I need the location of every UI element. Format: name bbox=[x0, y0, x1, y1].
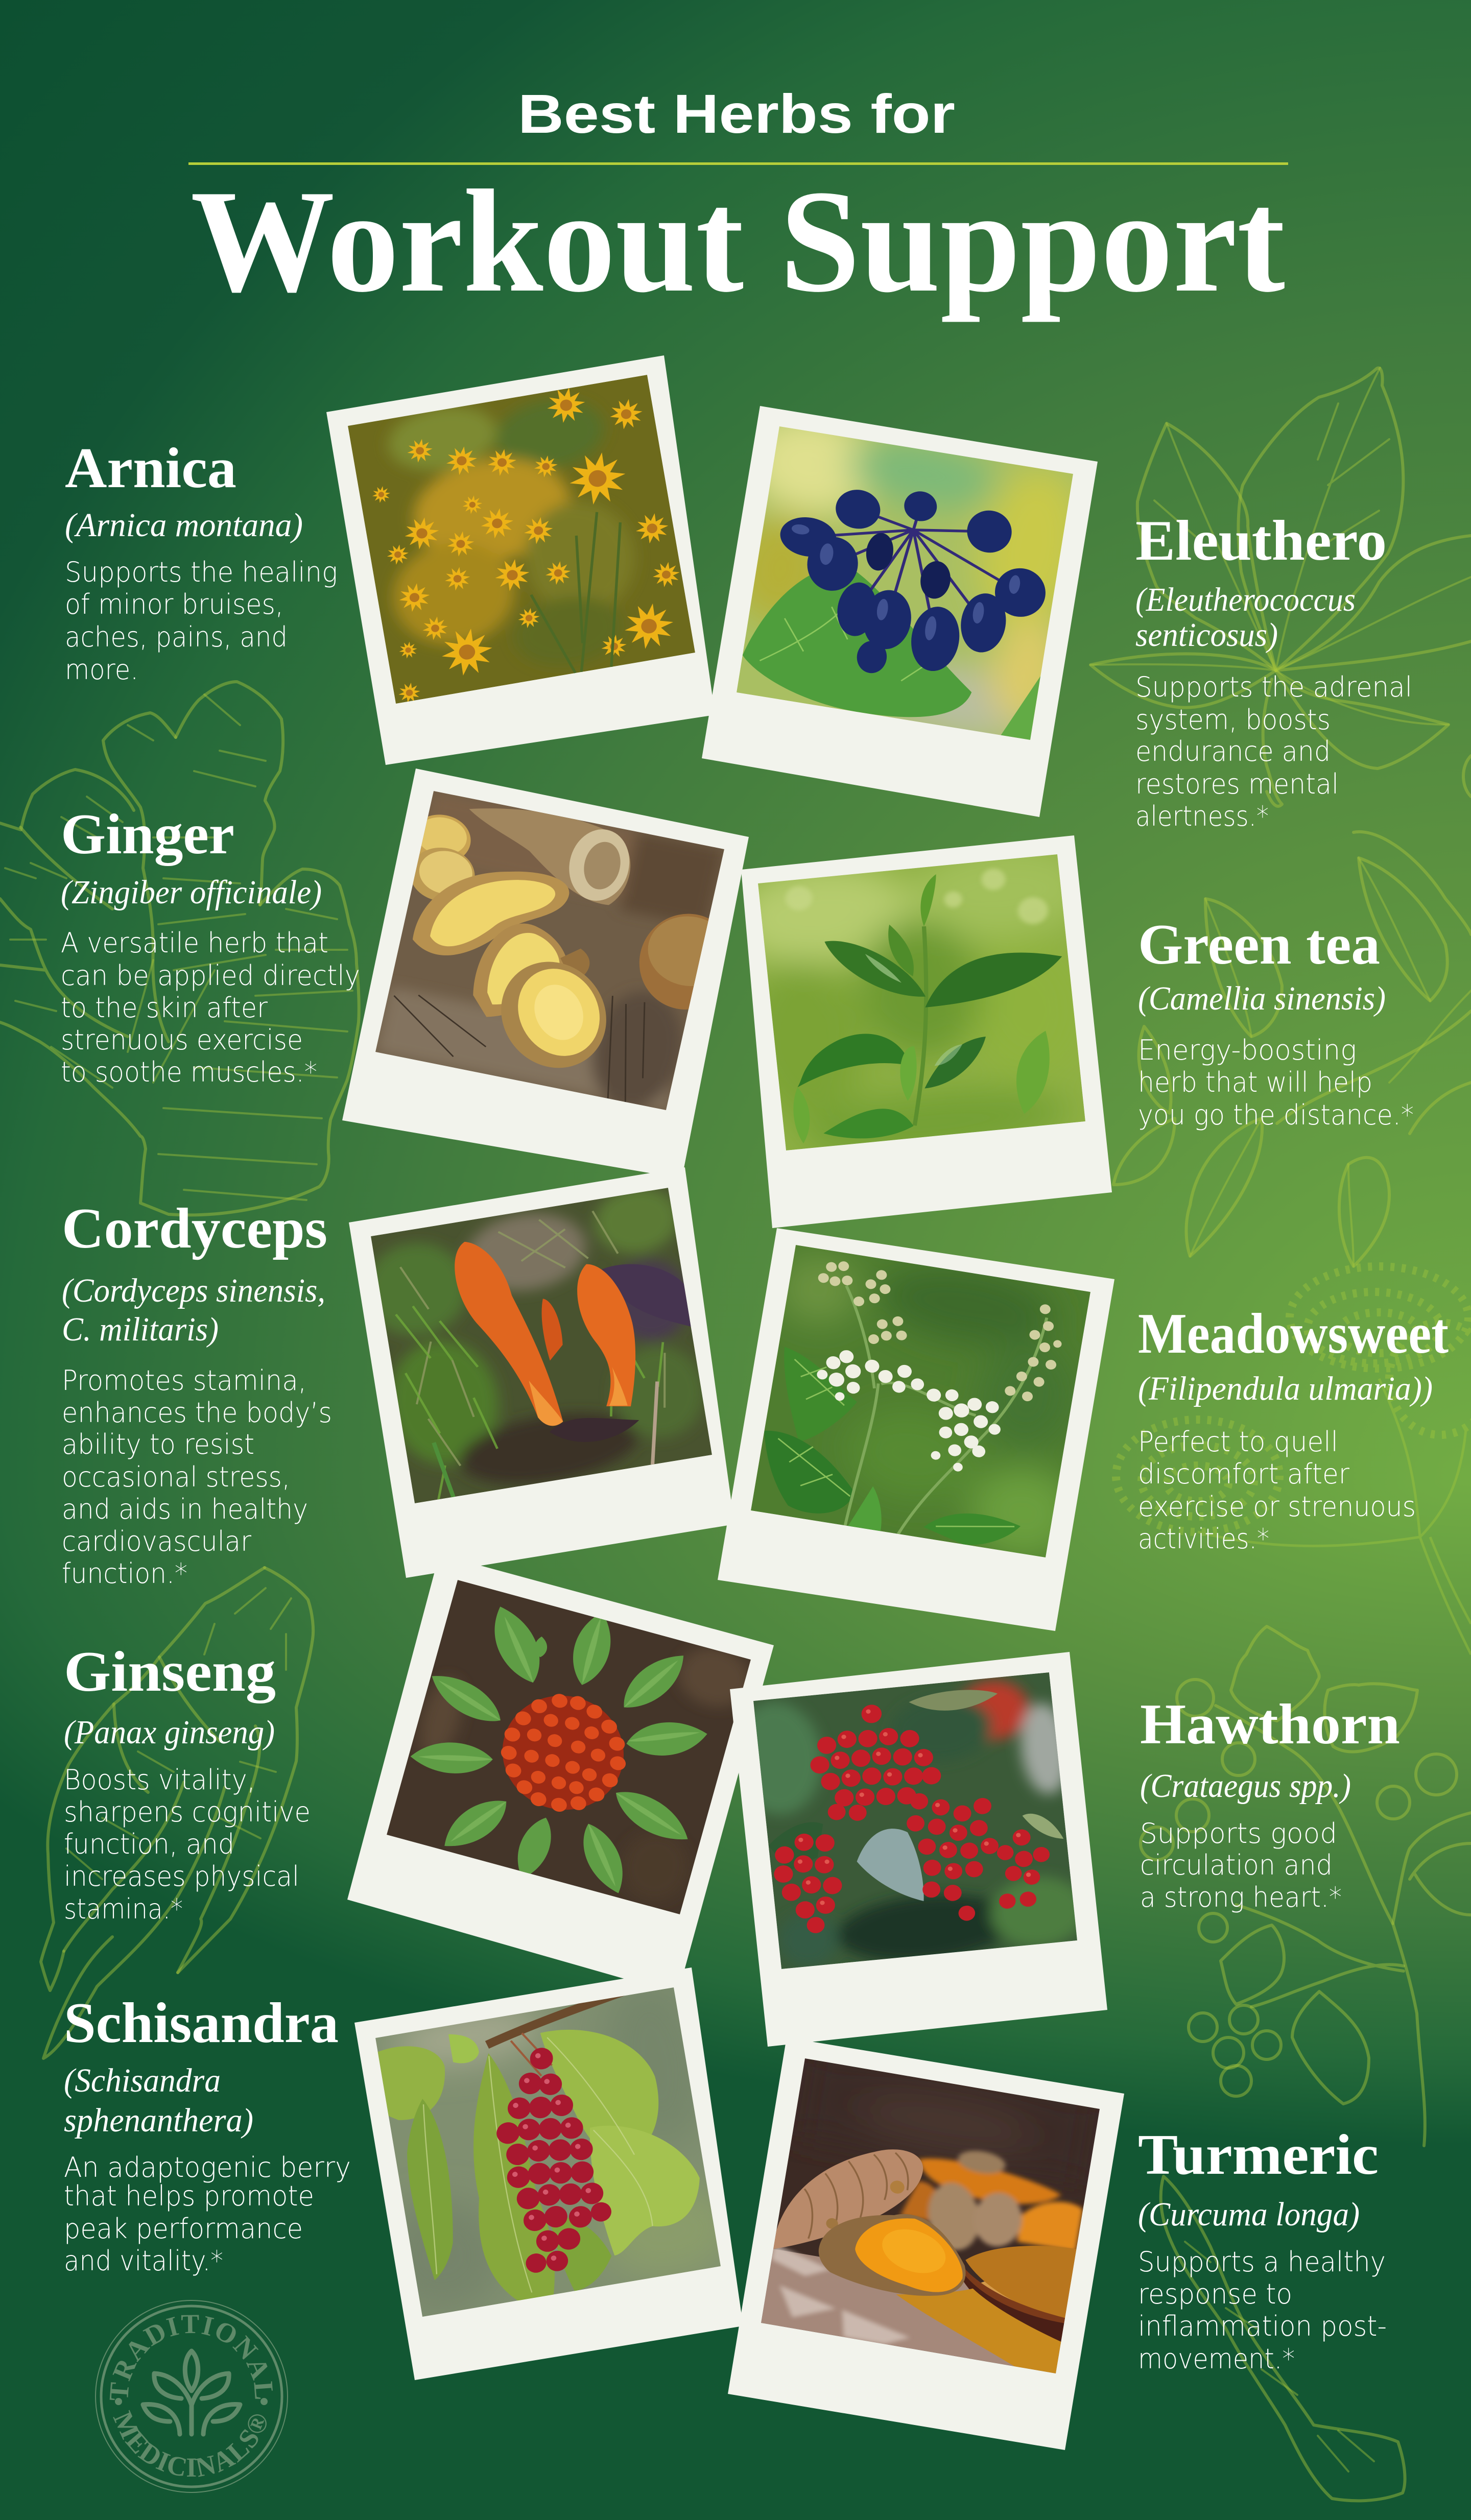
line art: ginger root bbox=[0, 682, 359, 1215]
description: inflammation post- bbox=[1138, 2310, 1387, 2342]
latin name: sphenanthera) bbox=[64, 2102, 253, 2139]
description: function.* bbox=[62, 1557, 187, 1590]
title rule bbox=[188, 162, 1288, 165]
herb text: Cordyceps bbox=[62, 1197, 332, 1590]
latin name: (Filipendula ulmaria)) bbox=[1138, 1370, 1433, 1407]
description: system, boosts bbox=[1135, 704, 1331, 736]
photo: arnica flowers bbox=[347, 372, 695, 705]
description: and aids in healthy bbox=[62, 1493, 308, 1525]
heading: Turmeric bbox=[1138, 2123, 1379, 2187]
herb text: Ginger bbox=[61, 803, 360, 1088]
latin name: (Cordyceps sinensis, bbox=[62, 1272, 325, 1309]
herb text: Arnica bbox=[65, 437, 338, 686]
description: circulation and bbox=[1140, 1849, 1333, 1881]
latin name: (Curcuma longa) bbox=[1138, 2196, 1360, 2233]
logo leaf mark bbox=[143, 2351, 240, 2434]
line art: hawthorn branch bbox=[1141, 1626, 1471, 2146]
photo: schisandra red berries bbox=[343, 1970, 742, 2324]
herb text: Green tea bbox=[1138, 913, 1414, 1131]
line art: ginseng root bbox=[41, 1568, 313, 2058]
description: exercise or strenuous bbox=[1138, 1491, 1416, 1523]
description: aches, pains, and bbox=[65, 621, 288, 653]
latin name: (Camellia sinensis) bbox=[1138, 980, 1386, 1017]
photo: ginger root slices bbox=[375, 791, 724, 1110]
logo: Traditional Medicinals seal bbox=[95, 2300, 288, 2493]
description: herb that will help bbox=[1138, 1066, 1372, 1098]
description: Boosts vitality, bbox=[64, 1764, 255, 1796]
description: endurance and bbox=[1135, 735, 1331, 767]
description: response to bbox=[1138, 2278, 1292, 2310]
description: Supports good bbox=[1140, 1817, 1337, 1850]
polaroid: Eleuthero bbox=[702, 406, 1098, 817]
description: can be applied directly bbox=[61, 959, 360, 992]
line art: turmeric root bbox=[1161, 2176, 1405, 2501]
description: stamina.* bbox=[64, 1893, 183, 1925]
description bbox=[1138, 2246, 1387, 2375]
title line 1: Best Herbs for bbox=[518, 83, 955, 145]
herb text: Turmeric bbox=[1138, 2123, 1387, 2375]
polaroid: Schisandra bbox=[343, 1967, 743, 2380]
latin name: (Crataegus spp.) bbox=[1140, 1767, 1351, 1805]
description: Supports a healthy bbox=[1138, 2246, 1386, 2278]
description: Promotes stamina, bbox=[62, 1364, 306, 1397]
polaroid: Hawthorn bbox=[727, 1652, 1107, 2047]
description: to the skin after bbox=[61, 992, 268, 1024]
description: restores mental bbox=[1135, 768, 1339, 800]
description: ability to resist bbox=[62, 1428, 254, 1460]
polaroid: Cordyceps bbox=[349, 1167, 734, 1578]
herb text: Ginseng bbox=[64, 1640, 311, 1925]
photo: green tea plant bbox=[727, 838, 1117, 1172]
main title: Workout Support bbox=[191, 160, 1287, 323]
description: sharpens cognitive bbox=[64, 1796, 311, 1828]
description bbox=[64, 2151, 351, 2277]
line art: green tea leaves bbox=[1113, 858, 1471, 1266]
description: A versatile herb that bbox=[61, 927, 328, 959]
polaroid: Ginger bbox=[342, 769, 760, 1179]
heading: Cordyceps bbox=[62, 1197, 327, 1260]
description: discomfort after bbox=[1138, 1458, 1350, 1490]
herb text: Eleuthero bbox=[1135, 509, 1412, 832]
heading: Eleuthero bbox=[1135, 509, 1387, 572]
description: alertness.* bbox=[1135, 800, 1269, 832]
description: Perfect to quell bbox=[1138, 1426, 1338, 1458]
description: movement.* bbox=[1138, 2343, 1295, 2375]
description: to soothe muscles.* bbox=[61, 1056, 317, 1088]
description: and vitality.* bbox=[64, 2245, 223, 2277]
logo text bottom: MEDICINALS® bbox=[113, 2410, 267, 2477]
polaroid: Green tea bbox=[727, 835, 1117, 1228]
photo: eleuthero berries bbox=[737, 426, 1073, 740]
description: of minor bruises, bbox=[65, 588, 283, 620]
polaroid: Meadowsweet bbox=[718, 1228, 1115, 1631]
latin name: (Arnica montana) bbox=[65, 507, 303, 544]
polaroid: Turmeric bbox=[728, 2037, 1124, 2450]
description: activities.* bbox=[1138, 1523, 1269, 1555]
photo: hawthorn red berries bbox=[727, 1671, 1089, 1977]
heading: Schisandra bbox=[64, 1991, 339, 2055]
latin name: (Schisandra bbox=[64, 2062, 221, 2099]
heading: Ginseng bbox=[64, 1640, 276, 1703]
description: Supports the adrenal bbox=[1135, 671, 1412, 703]
description: that helps promote bbox=[64, 2180, 314, 2212]
polaroid: Arnica bbox=[326, 355, 715, 765]
polaroid: Ginseng bbox=[347, 1554, 774, 1994]
description bbox=[64, 1764, 311, 1925]
description: increases physical bbox=[64, 1860, 299, 1892]
description bbox=[62, 1364, 332, 1590]
latin name bbox=[62, 1272, 325, 1348]
latin name: senticosus) bbox=[1135, 616, 1278, 654]
description bbox=[65, 556, 338, 686]
description: cardiovascular bbox=[62, 1525, 252, 1557]
description: peak performance bbox=[64, 2213, 303, 2245]
heading: Green tea bbox=[1138, 913, 1380, 976]
line art: meadowsweet flower heads bbox=[1116, 1266, 1471, 1654]
latin name: (Zingiber officinale) bbox=[61, 874, 322, 911]
photo: ginseng plant with red berries bbox=[380, 1572, 758, 1924]
title block bbox=[188, 83, 1288, 323]
description bbox=[61, 927, 360, 1088]
herb text: Meadowsweet bbox=[1138, 1302, 1449, 1555]
heading: Arnica bbox=[65, 437, 236, 500]
line art: eleuthero leaves bbox=[1090, 368, 1471, 934]
heading: Ginger bbox=[61, 803, 234, 866]
description: a strong heart.* bbox=[1140, 1881, 1342, 1913]
description: function, and bbox=[64, 1828, 234, 1860]
description bbox=[1140, 1817, 1342, 1913]
herb text: Schisandra bbox=[64, 1991, 351, 2277]
description: An adaptogenic berry bbox=[64, 2151, 351, 2183]
photo: turmeric roots and powder bbox=[761, 2048, 1101, 2373]
logo text top: TRADITIONAL bbox=[109, 2315, 273, 2400]
heading: Meadowsweet bbox=[1138, 1302, 1449, 1365]
photo: orange cordyceps in moss bbox=[355, 1182, 718, 1506]
latin name: (Eleutherococcus bbox=[1135, 581, 1356, 618]
latin name: (Panax ginseng) bbox=[64, 1714, 275, 1751]
heading: Hawthorn bbox=[1140, 1693, 1400, 1756]
description bbox=[1138, 1034, 1414, 1131]
latin name bbox=[1135, 581, 1356, 654]
description: Supports the healing bbox=[65, 556, 338, 588]
description: strenuous exercise bbox=[61, 1024, 303, 1056]
latin name bbox=[64, 2062, 253, 2139]
description bbox=[1135, 671, 1412, 832]
description: enhances the body’s bbox=[62, 1397, 332, 1429]
description: you go the distance.* bbox=[1138, 1099, 1414, 1131]
description: Energy-boosting bbox=[1138, 1034, 1357, 1066]
description bbox=[1138, 1426, 1416, 1555]
description: more. bbox=[65, 654, 138, 686]
description: occasional stress, bbox=[62, 1461, 290, 1493]
latin name: C. militaris) bbox=[62, 1311, 219, 1348]
photo: meadowsweet flowers bbox=[741, 1238, 1115, 1567]
herb text: Hawthorn bbox=[1140, 1693, 1400, 1913]
